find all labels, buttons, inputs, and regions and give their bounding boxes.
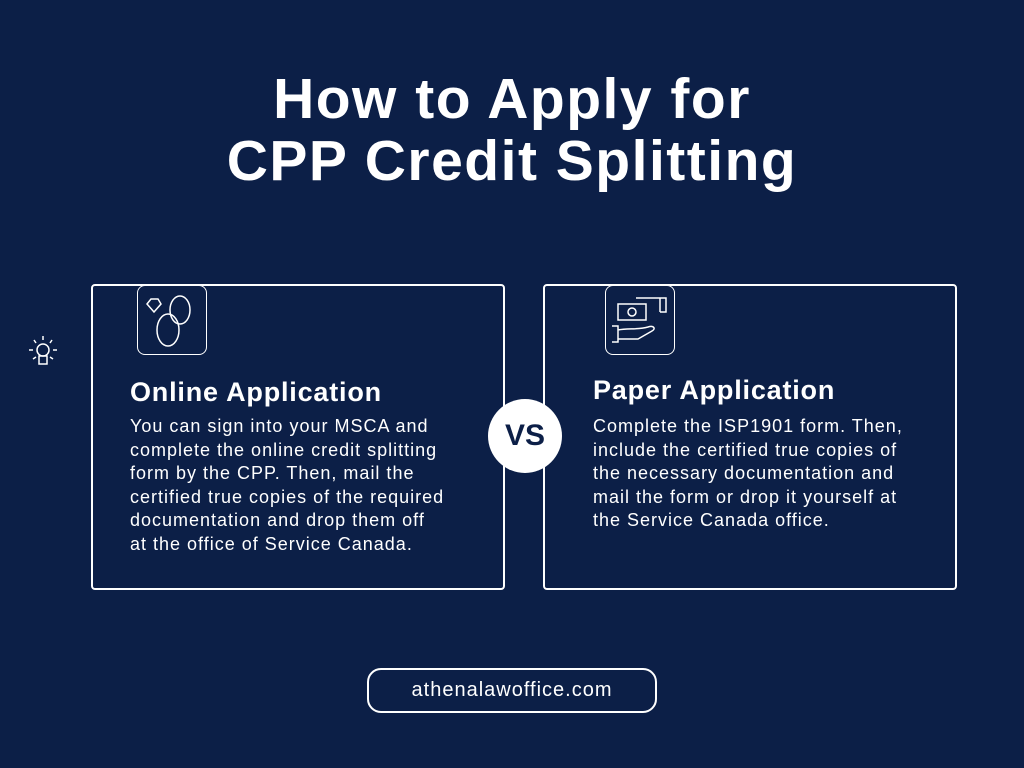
heading: Online Application: [130, 377, 382, 407]
text: You can sign into your MSCA and: [130, 416, 429, 436]
title: How to Apply for: [273, 67, 751, 131]
heading: Paper Application: [593, 375, 835, 405]
text: documentation and drop them off: [130, 510, 425, 530]
text: complete the online credit splitting: [130, 440, 437, 460]
icon: rings: [137, 285, 207, 355]
text: Complete the ISP1901 form. Then,: [593, 416, 903, 436]
text: [130, 416, 444, 554]
vs badge: VS: [505, 419, 545, 452]
text: the Service Canada office.: [593, 510, 830, 530]
text: include the certified true copies of: [593, 440, 897, 460]
title: [227, 67, 797, 193]
footer url: athenalawoffice.com: [412, 679, 612, 701]
title: CPP Credit Splitting: [227, 129, 797, 193]
panel: online application: [91, 284, 505, 590]
icon: lightbulb: [29, 336, 57, 365]
footer url: [367, 668, 657, 713]
text: at the office of Service Canada.: [130, 534, 413, 554]
text: certified true copies of the required: [130, 487, 444, 507]
panel: paper application: [543, 284, 957, 590]
text: mail the form or drop it yourself at: [593, 487, 897, 507]
text: the necessary documentation and: [593, 463, 894, 483]
vs badge: [488, 399, 562, 473]
icon: money hands: [605, 285, 675, 355]
text: form by the CPP. Then, mail the: [130, 463, 414, 483]
text: [593, 416, 903, 530]
